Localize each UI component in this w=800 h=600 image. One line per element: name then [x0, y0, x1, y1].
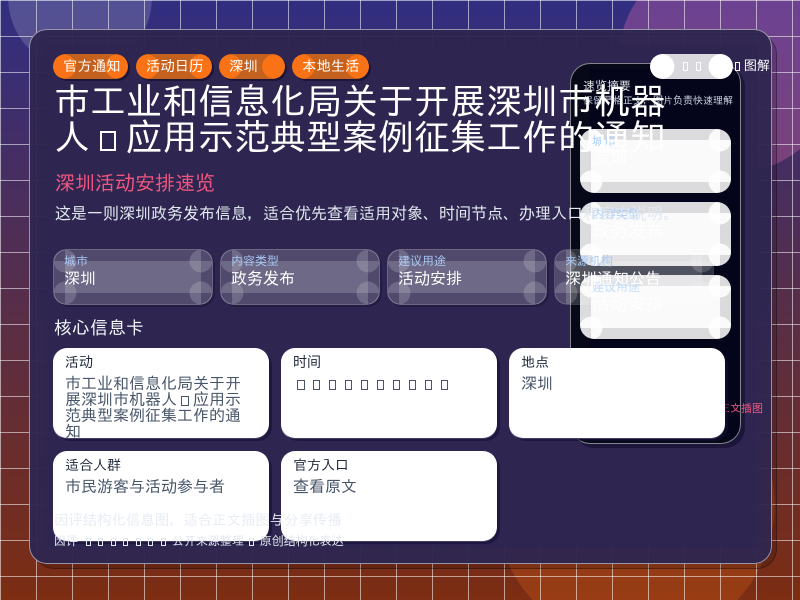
card: time — [281, 348, 497, 438]
card: audience: 市民游客与活动参与者 — [65, 478, 225, 494]
title: 人 应用示范典型案例征集工作的通知 — [54, 119, 666, 155]
metric: source: 来源机构 — [565, 255, 613, 267]
card: official entry — [281, 451, 497, 541]
tag: local life: 本地生活 — [302, 58, 360, 73]
card: official entry: 官方入口 — [293, 458, 349, 472]
title — [54, 83, 666, 155]
footer note: 因评结构化信息图，适合正文插图与分享传播 — [54, 512, 342, 527]
side card: content type: 内容类型 — [592, 208, 640, 220]
card: time: 时间 — [293, 355, 321, 369]
pill label — [683, 59, 770, 72]
card: activity: 市工业和信息化局关于开展深圳市机器人 应用示范典型案例征集工作的通知 — [65, 375, 241, 439]
metric: content type — [220, 249, 380, 305]
side card: city: 深圳 — [592, 149, 628, 167]
tag: official notice — [53, 54, 128, 79]
card: activity: 活动 — [65, 355, 93, 369]
tag: calendar — [136, 54, 212, 79]
side panel heading: 速览摘要 — [583, 80, 631, 92]
side card: content type: 政务发布 — [592, 222, 664, 240]
footer credit: 因评 公开来源整理 原创结构化表达 — [54, 535, 344, 547]
side card: city — [580, 129, 731, 193]
side card: content type — [580, 202, 731, 266]
tag: Shenzhen: 深圳 — [229, 58, 258, 73]
side note: illustration: 正文插图 — [719, 403, 763, 414]
card: audience — [53, 451, 269, 541]
metric: city — [53, 249, 213, 305]
tag: local life — [292, 54, 369, 79]
side card: usage: 活动安排 — [592, 295, 664, 313]
tag: official notice: 官方通知 — [63, 58, 121, 73]
card: activity — [53, 348, 269, 438]
metric: content type: 内容类型 — [231, 255, 279, 267]
tag: Shenzhen — [219, 54, 285, 79]
metric: city: 城市 — [64, 255, 88, 267]
top-right pill — [650, 54, 733, 79]
metric: source: 深圳通知公告 — [565, 270, 661, 286]
card: audience: 适合人群 — [65, 458, 121, 472]
title: 市工业和信息化局关于开展深圳市机器 — [54, 83, 666, 119]
metric: usage: 活动安排 — [398, 270, 462, 286]
card: place: 地点 — [521, 355, 549, 369]
pill label: 图解 — [744, 59, 770, 72]
metric: city: 深圳 — [64, 270, 96, 286]
description: 这是一则深圳政务发布信息，适合优先查看适用对象、时间节点、办理入口和官方说明。 — [55, 205, 679, 221]
tag: calendar: 活动日历 — [146, 58, 204, 73]
section heading: 核心信息卡 — [54, 319, 144, 337]
side panel note: 保留严格正文，图片负责快速理解 — [583, 96, 733, 106]
side card: usage — [580, 275, 731, 339]
metric: content type: 政务发布 — [231, 270, 295, 286]
metric: usage — [387, 249, 547, 305]
metric: source — [554, 249, 714, 305]
card: place: 深圳 — [521, 375, 553, 391]
subtitle: 深圳活动安排速览 — [55, 173, 215, 193]
metric: usage: 建议用途 — [398, 255, 446, 267]
side panel: summary — [570, 63, 741, 444]
card: official entry: 查看原文 — [293, 478, 357, 494]
card: place — [509, 348, 725, 438]
side card: city: 城市 — [592, 135, 616, 147]
side card: usage: 建议用途 — [592, 281, 640, 293]
